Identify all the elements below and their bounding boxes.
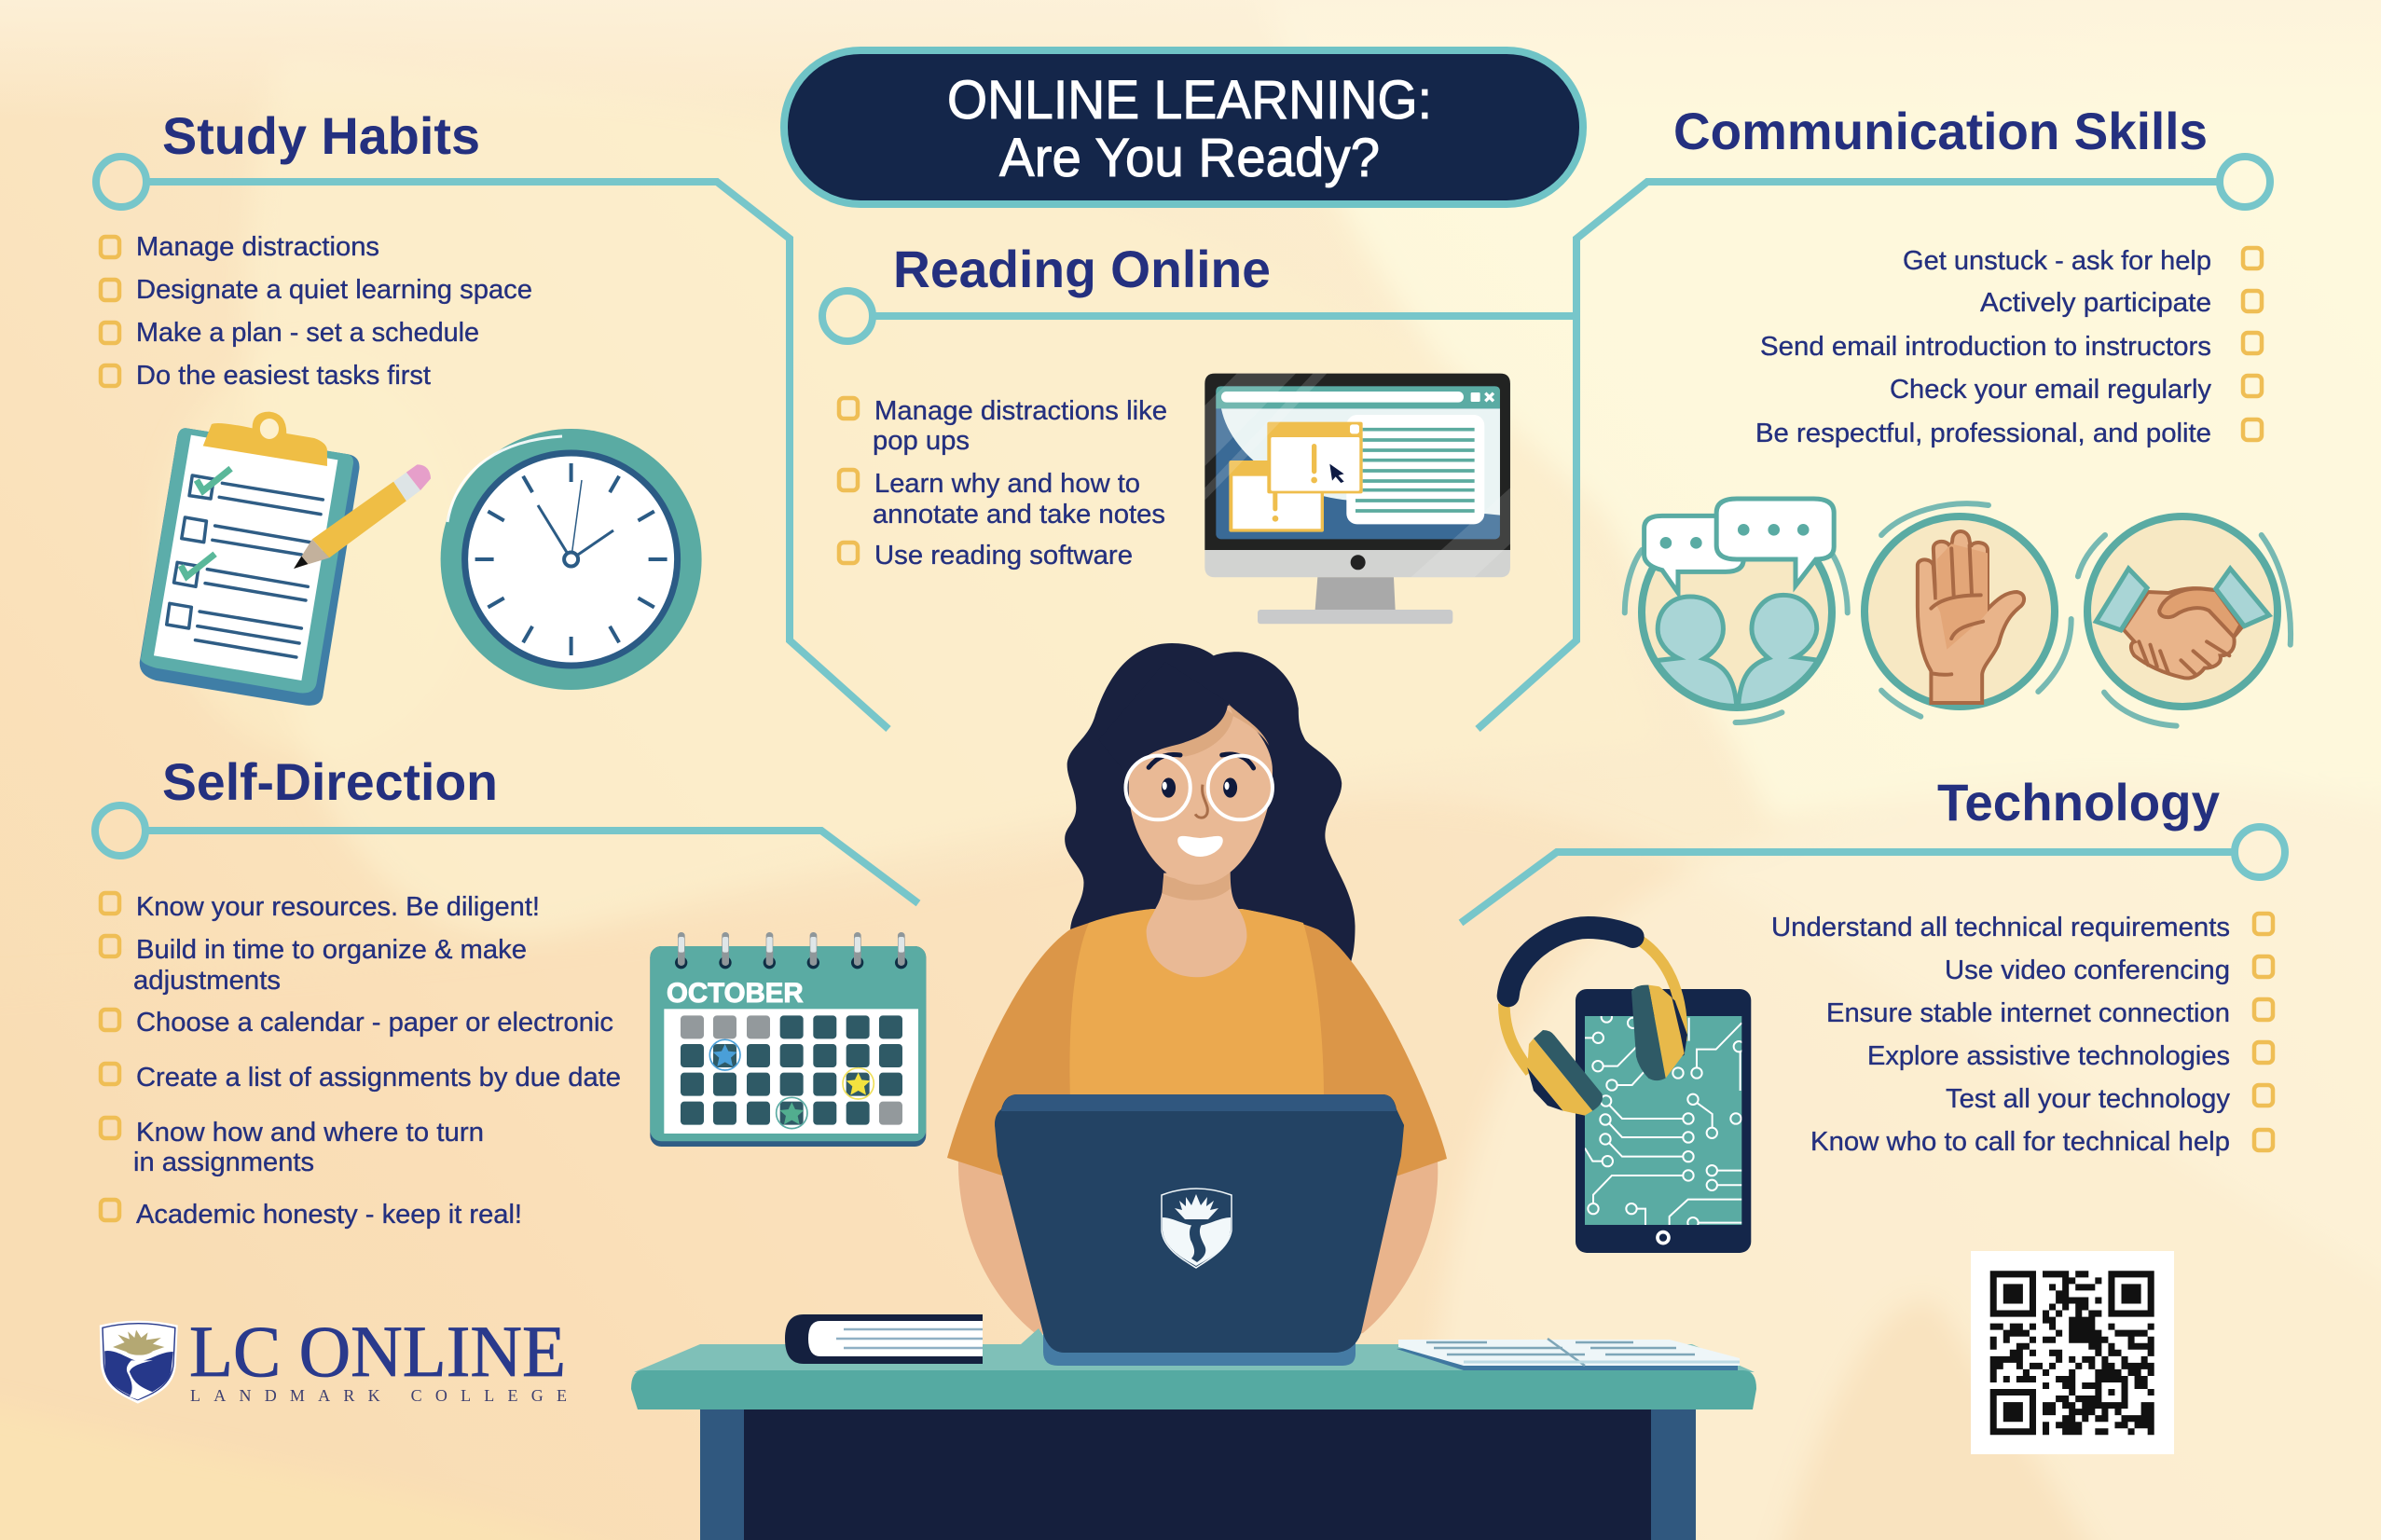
checklist: communication skills bbox=[1755, 246, 2262, 448]
icon: clipboard and pencil bbox=[140, 412, 431, 706]
checklist: self-direction: Create a list of assignments by due date bbox=[136, 1063, 621, 1093]
checklist: reading online: pop ups bbox=[873, 426, 970, 456]
checklist: self-direction: Know your resources. Be diligent! bbox=[136, 892, 540, 922]
panel: technology bbox=[1504, 773, 2273, 1454]
checklist: self-direction: Know how and where to turn bbox=[136, 1118, 484, 1148]
checklist: reading online: Manage distractions like bbox=[874, 396, 1167, 426]
title pill bbox=[784, 50, 1583, 204]
checklist: self-direction: Choose a calendar - paper or electronic bbox=[136, 1008, 613, 1038]
logo: LC Online Landmark College: LANDMARK COLLEGE bbox=[190, 1386, 567, 1405]
checklist: technology: Use video conferencing bbox=[1945, 956, 2230, 985]
checklist: communication skills: Send email introduction to instructors bbox=[1760, 332, 2211, 362]
checklist: technology: Ensure stable internet connection bbox=[1826, 998, 2230, 1028]
illustration: woman at desk with laptop bbox=[631, 643, 1756, 1540]
checklist: technology: Understand all technical requirements bbox=[1771, 913, 2230, 942]
checklist: study habits: Manage distractions bbox=[136, 232, 379, 262]
laptop shield logo bbox=[1162, 1189, 1232, 1268]
heading: reading online: Reading Online bbox=[893, 240, 1271, 298]
icon: shield logo bbox=[100, 1321, 178, 1404]
title pill: ONLINE LEARNING: bbox=[947, 70, 1432, 131]
QR code bbox=[1971, 1251, 2174, 1454]
checklist: study habits: Designate a quiet learning space bbox=[136, 275, 532, 305]
panel: reading online bbox=[839, 240, 1510, 624]
checklist: technology bbox=[1771, 913, 2273, 1157]
book bbox=[785, 1314, 983, 1364]
woman: hair back bbox=[1065, 643, 1356, 965]
notebook papers bbox=[1397, 1339, 1740, 1370]
heading: self-direction: Self-Direction bbox=[162, 752, 498, 811]
woman: arms bbox=[958, 1156, 1438, 1342]
icon: october calendar bbox=[650, 932, 926, 1147]
logo: LC Online Landmark College bbox=[100, 1311, 567, 1405]
checklist: technology: Test all your technology bbox=[1946, 1084, 2230, 1114]
checklist: reading online: Learn why and how to bbox=[874, 469, 1140, 499]
icon: tablet with headphones bbox=[1504, 928, 1751, 1253]
woman: head bbox=[1099, 662, 1273, 977]
heading: communication skills: Communication Skills bbox=[1673, 102, 2208, 160]
checklist: reading online: Use reading software bbox=[874, 541, 1133, 571]
title pill: Are You Ready? bbox=[999, 128, 1380, 188]
laptop bbox=[995, 1094, 1404, 1366]
heading: study habits: Study Habits bbox=[162, 106, 480, 165]
checklist: self-direction bbox=[101, 892, 621, 1230]
checklist: technology: Know who to call for technical help bbox=[1810, 1127, 2230, 1157]
woman: shirt bbox=[947, 909, 1447, 1176]
checklist: communication skills: Actively participate bbox=[1980, 288, 2211, 318]
icon: wall clock bbox=[441, 429, 702, 690]
checklist: reading online: annotate and take notes bbox=[873, 500, 1165, 529]
checklist: reading online bbox=[839, 396, 1167, 571]
connector lines bbox=[95, 157, 2285, 923]
checklist: study habits bbox=[101, 232, 532, 391]
checklist: study habits: Do the easiest tasks first bbox=[136, 361, 431, 391]
checklist: self-direction: Build in time to organize & make bbox=[136, 935, 527, 965]
panel: study habits bbox=[101, 106, 702, 706]
icon: two people talking bbox=[1625, 499, 1848, 722]
headphones bbox=[1504, 928, 1687, 1116]
checklist: communication skills: Be respectful, professional, and polite bbox=[1755, 419, 2211, 448]
logo: LC Online Landmark College: LC ONLINE bbox=[189, 1311, 566, 1392]
panel: self-direction bbox=[100, 752, 926, 1405]
checklist: communication skills: Get unstuck - ask for help bbox=[1903, 246, 2211, 276]
icon: desktop monitor with popups bbox=[1204, 374, 1510, 624]
checklist: self-direction: in assignments bbox=[133, 1148, 314, 1177]
icon: handshake bbox=[2078, 516, 2291, 726]
checklist: communication skills: Check your email regularly bbox=[1890, 375, 2211, 405]
icon: october calendar: OCTOBER bbox=[667, 978, 804, 1009]
desk bbox=[631, 1344, 1756, 1540]
icon: raised hand bbox=[1865, 503, 2071, 717]
checklist: technology: Explore assistive technologies bbox=[1867, 1041, 2230, 1071]
heading: technology: Technology bbox=[1937, 773, 2220, 832]
checklist: self-direction: adjustments bbox=[133, 966, 281, 996]
checklist: self-direction: Academic honesty - keep it real! bbox=[136, 1200, 522, 1230]
checklist: study habits: Make a plan - set a schedule bbox=[136, 318, 479, 348]
panel: communication skills bbox=[1625, 102, 2291, 726]
